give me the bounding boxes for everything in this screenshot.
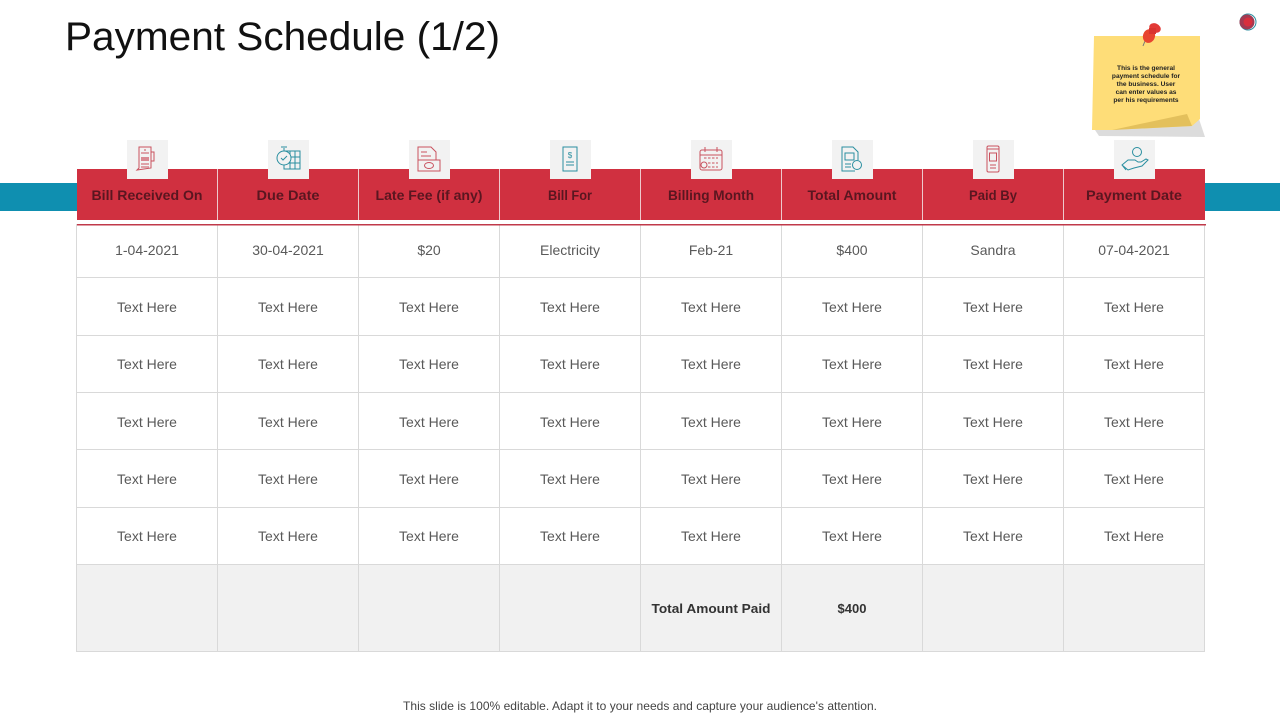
data row 3: Text Here — [681, 356, 741, 372]
data row 5: Text Here — [1104, 471, 1164, 487]
data row 3: Text Here — [1104, 356, 1164, 372]
data row 5 — [117, 471, 1164, 487]
data row 5: Text Here — [540, 471, 600, 487]
data row 1: 30-04-2021 — [252, 242, 324, 258]
data row 4: Text Here — [399, 414, 459, 430]
table header row: Payment Date — [1086, 187, 1182, 203]
icon: total amount document — [832, 140, 873, 179]
icon: receipt: $ — [568, 151, 573, 160]
icon: receipt — [550, 140, 591, 179]
data row 2 — [117, 299, 1164, 315]
icon: paid phone — [973, 140, 1014, 179]
data row 6: Text Here — [1104, 528, 1164, 544]
data row 1: $20 — [417, 242, 441, 258]
data row 5: Text Here — [117, 471, 177, 487]
data row 5: Text Here — [258, 471, 318, 487]
data row 4: Text Here — [822, 414, 882, 430]
table header row — [77, 169, 1205, 220]
icon: payment hand with coin — [1114, 140, 1155, 179]
data row 6: Text Here — [258, 528, 318, 544]
data row 1: Feb-21 — [689, 242, 733, 258]
data row 2: Text Here — [399, 299, 459, 315]
data row 2: Text Here — [1104, 299, 1164, 315]
data row 4: Text Here — [258, 414, 318, 430]
sticky note text: per his requirements — [1113, 97, 1179, 104]
data row 1: 1-04-2021 — [115, 242, 179, 258]
red rule under header — [77, 224, 1206, 226]
data row 1 — [115, 242, 1170, 258]
data row 3: Text Here — [399, 356, 459, 372]
table header row: Paid By — [969, 187, 1017, 203]
icon: corner dot — [1240, 14, 1256, 30]
table header row: Billing Month — [668, 187, 754, 203]
data row 3: Text Here — [117, 356, 177, 372]
data row 2: Text Here — [117, 299, 177, 315]
table grid — [76, 224, 1205, 652]
table header row: Due Date — [256, 187, 320, 203]
data row 3: Text Here — [540, 356, 600, 372]
data row 1: 07-04-2021 — [1098, 242, 1170, 258]
data row 3 — [117, 356, 1164, 372]
data row 6: Text Here — [117, 528, 177, 544]
data row 2: Text Here — [822, 299, 882, 315]
total amount paid — [652, 601, 866, 616]
table header row: Bill Received On — [92, 187, 202, 203]
data row 2: Text Here — [258, 299, 318, 315]
teal band behind table — [0, 183, 1280, 211]
data row 1: Sandra — [970, 242, 1016, 258]
data row 6: Text Here — [822, 528, 882, 544]
sticky note text: can enter values as — [1116, 89, 1177, 96]
data row 2: Text Here — [540, 299, 600, 315]
icon: late fee document and banknote — [409, 140, 450, 179]
sticky note text: payment schedule for — [1112, 73, 1181, 80]
data row 4: Text Here — [540, 414, 600, 430]
data row 5: Text Here — [681, 471, 741, 487]
data row 3: Text Here — [822, 356, 882, 372]
title: Payment Schedule (1/2) — [65, 15, 500, 59]
data row 3: Text Here — [258, 356, 318, 372]
table — [76, 169, 1206, 652]
table header row: Late Fee (if any) — [376, 187, 482, 203]
data row 2: Text Here — [681, 299, 741, 315]
data row 5: Text Here — [963, 471, 1023, 487]
sticky note text: This is the general — [1117, 65, 1175, 72]
sticky note text — [1112, 65, 1181, 104]
data row 6: Text Here — [540, 528, 600, 544]
data row 4: Text Here — [117, 414, 177, 430]
data row 5: Text Here — [399, 471, 459, 487]
data row 6 — [117, 528, 1164, 544]
icon: bill received — [127, 140, 168, 179]
data row 6: Text Here — [399, 528, 459, 544]
table header row: Total Amount — [808, 187, 897, 203]
sticky note text: the business. User — [1117, 81, 1176, 88]
icon: red push pin — [1141, 21, 1162, 46]
data row 6: Text Here — [963, 528, 1023, 544]
total amount paid: Total Amount Paid — [652, 601, 771, 616]
data row 6: Text Here — [681, 528, 741, 544]
total row background — [77, 565, 1205, 652]
data row 1: Electricity — [540, 242, 600, 258]
data row 4: Text Here — [681, 414, 741, 430]
table header row: Bill For — [548, 187, 592, 203]
data row 4: Text Here — [1104, 414, 1164, 430]
sticky note — [1092, 21, 1205, 137]
data row 4 — [117, 414, 1164, 430]
data row 3: Text Here — [963, 356, 1023, 372]
data row 4: Text Here — [963, 414, 1023, 430]
footer note: This slide is 100% editable. Adapt it to your needs and capture your audience's attention. — [403, 699, 877, 713]
total amount paid: $400 — [838, 601, 866, 616]
icon: due date stopwatch and calendar — [268, 140, 309, 179]
data row 2: Text Here — [963, 299, 1023, 315]
data row 1: $400 — [836, 242, 868, 258]
data row 5: Text Here — [822, 471, 882, 487]
icon: calendar — [691, 140, 732, 179]
